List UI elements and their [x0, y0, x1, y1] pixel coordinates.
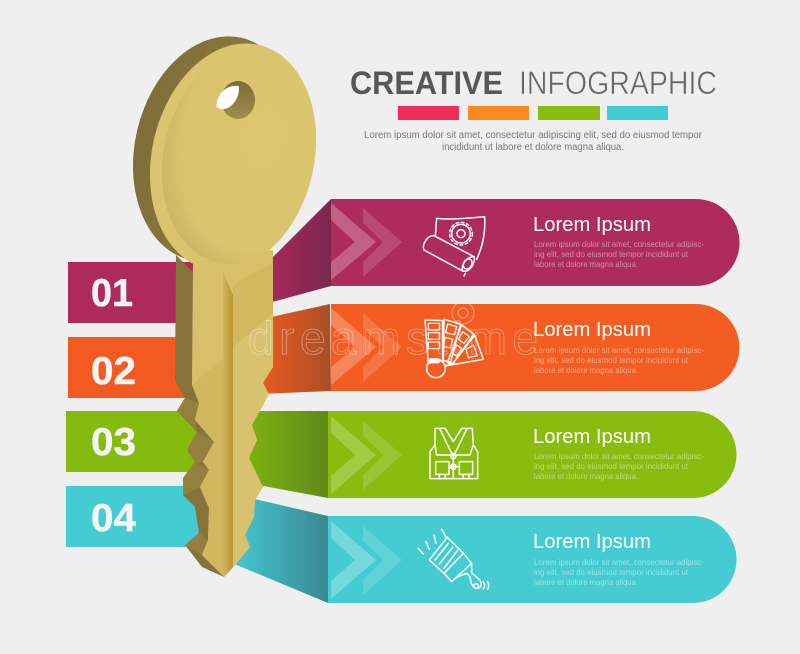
- band 4: Lorem ipsum dolor sit amet, consectetur adipisc-: [534, 557, 704, 567]
- title: INFOGRAPHIC: [519, 65, 717, 101]
- band 3: ing elit, sed do eiusmod tempor incididunt ut: [534, 461, 689, 471]
- number tab 01: [68, 262, 198, 323]
- band 1: Lorem ipsum dolor sit amet, consectetur adipisc-: [534, 239, 704, 249]
- key tooth facets: [177, 398, 214, 555]
- band 4: ing elit, sed do eiusmod tempor incididunt ut: [534, 567, 689, 577]
- number tab 04: 04: [91, 497, 136, 540]
- band 3: Lorem ipsum dolor sit amet, consectetur adipisc-: [534, 451, 704, 461]
- band 3: [240, 411, 736, 498]
- number tab 03: 03: [91, 421, 136, 464]
- number tab 01: 01: [91, 272, 133, 315]
- key head front: [128, 27, 338, 287]
- key illustration: [133, 36, 316, 577]
- colour swatches: [398, 106, 668, 120]
- band 1: [265, 199, 740, 304]
- infographic canvas: [66, 36, 740, 603]
- number tab 02: 02: [91, 350, 136, 393]
- key hole: [216, 81, 255, 119]
- number tab 03: [66, 411, 206, 472]
- band 2: Lorem Ipsum: [533, 319, 651, 341]
- subtitle text: Lorem ipsum dolor sit amet, consectetur adipiscing elit, sed do eiusmod tempor: [364, 130, 703, 141]
- watermark: dreamstime: [248, 312, 538, 364]
- title: CREATIVE: [350, 65, 503, 101]
- icon: colour swatch fan: [425, 319, 483, 378]
- key centre ridge: [192, 262, 273, 590]
- band 1: Lorem Ipsum: [533, 214, 651, 236]
- band 2: labore et dolore magna aliqua.: [534, 365, 638, 375]
- title: [350, 65, 717, 101]
- band 3: Lorem Ipsum: [533, 426, 651, 448]
- icon: paint brush: [418, 529, 489, 589]
- icon: work vest: [430, 428, 478, 479]
- band 4: [232, 498, 736, 603]
- subtitle text: incididunt ut labore et dolore magna aliqua.: [442, 142, 624, 153]
- band 3: labore et dolore magna aliqua.: [534, 471, 638, 481]
- band 2: [258, 304, 739, 394]
- band 2: Lorem ipsum dolor sit amet, consectetur adipisc-: [534, 345, 704, 355]
- key blade front: [192, 250, 273, 577]
- key head back edge: [111, 20, 321, 278]
- band 4: Lorem Ipsum: [533, 531, 651, 553]
- key head recess: [162, 58, 316, 260]
- band 4: labore et dolore magna aliqua.: [534, 577, 638, 587]
- number tab 02: [68, 337, 198, 398]
- band 1: ing elit, sed do eiusmod tempor incididunt ut: [534, 249, 689, 259]
- number tab 04: [66, 486, 206, 547]
- key shaft side: [175, 255, 230, 577]
- band 1: labore et dolore magna aliqua.: [534, 259, 638, 269]
- icon: fabric roll with gear: [423, 217, 485, 276]
- band 2: ing elit, sed do eiusmod tempor incididunt ut: [534, 355, 689, 365]
- subtitle text: [364, 130, 703, 153]
